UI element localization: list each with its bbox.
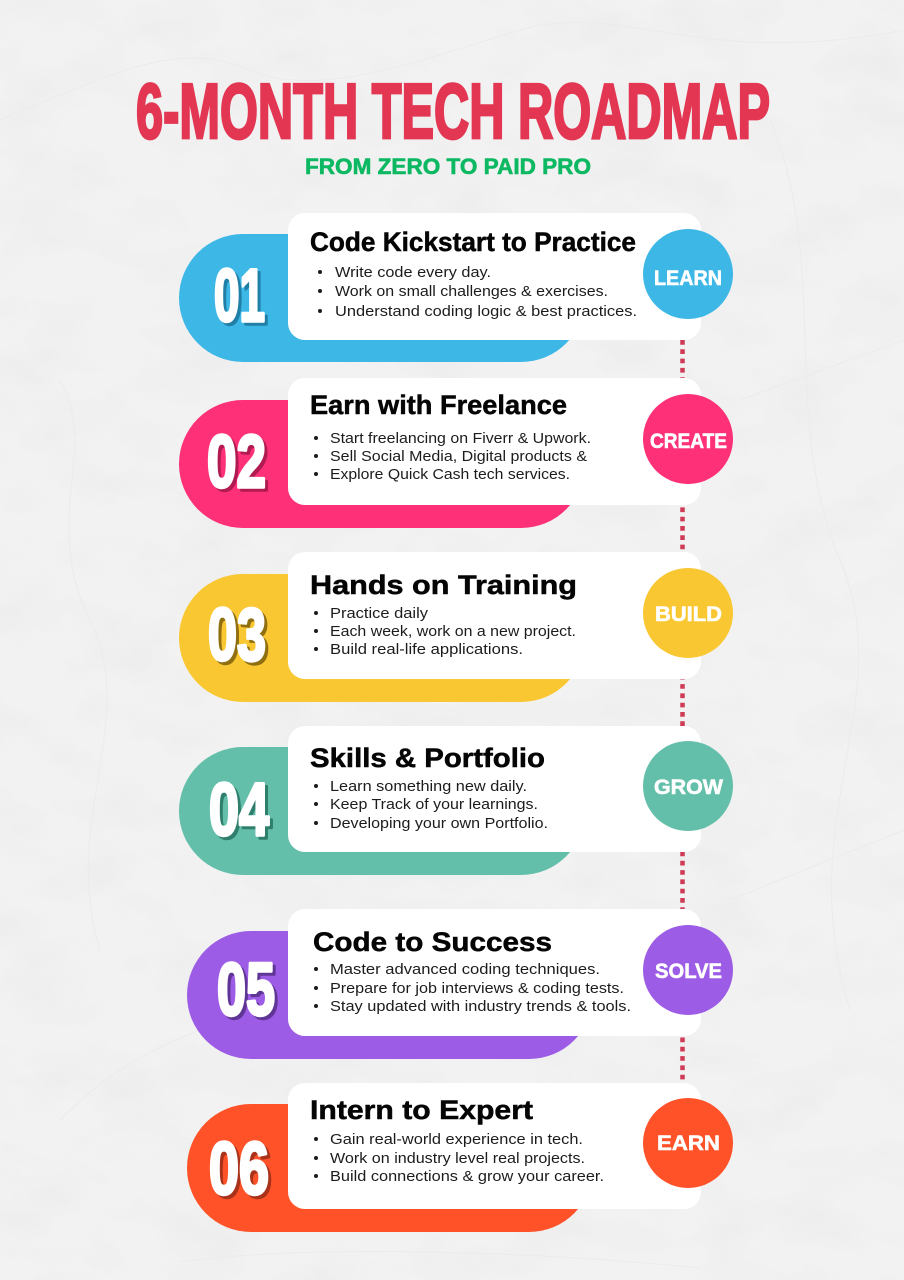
dotted connector line — [680, 340, 685, 1083]
step 01 badge: LEARN — [643, 229, 733, 319]
step 04 heading: Skills & Portfolio — [310, 743, 545, 773]
step 03 badge: BUILD — [643, 568, 733, 658]
step 03 badge: BUILD: BUILD — [655, 603, 722, 626]
step 01 white card — [288, 213, 701, 340]
step 01 badge: LEARN: LEARN — [654, 267, 722, 290]
step 04 white card — [288, 726, 701, 852]
step 03 bullet list: Each week, work on a new project. — [330, 623, 576, 640]
step 02 bullet list: Sell Social Media, Digital products & — [330, 448, 587, 465]
step 01 bullet list — [318, 264, 637, 320]
step 05 badge: SOLVE: SOLVE — [655, 960, 722, 983]
step 06 bullet list — [314, 1131, 604, 1185]
step 02 bullet list: Explore Quick Cash tech services. — [330, 466, 570, 483]
step 04 coloured pill — [179, 747, 585, 875]
step 01 bullet list: Work on small challenges & exercises. — [335, 283, 608, 300]
subtitle: FROM ZERO TO PAID PRO — [305, 154, 591, 179]
step 03 number: 03 — [211, 596, 269, 679]
step 05 badge: SOLVE — [643, 925, 733, 1015]
step 05 number: 05 — [217, 948, 275, 1031]
step 06 number: 06 — [209, 1127, 269, 1210]
step 03 coloured pill — [179, 574, 585, 702]
step 05 bullet list: Prepare for job interviews & coding tests. — [330, 980, 624, 997]
step 05 heading: Code to Success — [313, 927, 552, 957]
step 03 number: 03 — [208, 593, 266, 676]
step 04 bullet list: Keep Track of your learnings. — [330, 796, 538, 813]
step 06 badge: EARN: EARN — [657, 1132, 720, 1155]
step 01 bullet list: Write code every day. — [335, 264, 491, 281]
step 06 heading: Intern to Expert — [310, 1095, 533, 1125]
step 06 badge: EARN — [643, 1098, 733, 1188]
step 04 number: 04 — [212, 771, 272, 854]
step 01 number — [214, 254, 268, 340]
step 05 number: 05 — [220, 951, 278, 1034]
step 02 badge: CREATE — [643, 394, 733, 484]
step 05 white card — [288, 909, 701, 1036]
panel: step 01 — [179, 213, 733, 362]
step 05 bullet list: Stay updated with industry trends & tools. — [330, 998, 631, 1015]
step 02 bullet list: Start freelancing on Fiverr & Upwork. — [330, 430, 591, 447]
step 03 bullet list — [314, 605, 576, 658]
step 02 coloured pill — [179, 400, 585, 528]
step 03 heading: Hands on Training — [310, 570, 577, 600]
step 05 coloured pill — [187, 931, 593, 1059]
step 04 bullet list: Developing your own Portfolio. — [330, 815, 548, 832]
step 03 white card — [288, 552, 701, 679]
step 03 bullet list: Practice daily — [330, 605, 429, 622]
panel: step 03 — [179, 552, 733, 702]
panel: step 05 — [187, 909, 733, 1059]
step 06 bullet list: Build connections & grow your career. — [330, 1168, 604, 1185]
step 06 number: 06 — [212, 1130, 272, 1213]
step 01 heading: Code Kickstart to Practice — [310, 227, 636, 257]
step 06 coloured pill — [187, 1104, 593, 1232]
step 06 bullet list: Work on industry level real projects. — [330, 1150, 585, 1167]
step 06 white card — [288, 1083, 701, 1209]
step 01 bullet list: Understand coding logic & best practices. — [335, 303, 637, 320]
step 02 number: 02 — [210, 423, 269, 506]
step 03 bullet list: Build real-life applications. — [330, 641, 523, 658]
step 02 heading: Earn with Freelance — [310, 390, 567, 420]
step 04 bullet list: Learn something new daily. — [330, 778, 527, 795]
step 02 number: 02 — [207, 420, 266, 503]
step 02 bullet list — [314, 430, 591, 483]
step 04 number: 04 — [209, 768, 269, 851]
step 01 number: 01 — [217, 257, 268, 340]
panel: step 06 — [187, 1083, 733, 1232]
step 02 white card — [288, 378, 701, 505]
step 04 badge: GROW — [643, 741, 733, 831]
step 04 bullet list — [314, 778, 548, 832]
step 02 badge: CREATE: CREATE — [650, 430, 727, 453]
step 06 bullet list: Gain real-world experience in tech. — [330, 1131, 583, 1148]
step 01 coloured pill — [179, 234, 585, 362]
step 05 bullet list: Master advanced coding techniques. — [330, 961, 600, 978]
step 05 bullet list — [314, 961, 631, 1015]
step 04 badge: GROW: GROW — [654, 776, 723, 799]
panel: step 02 — [179, 378, 733, 528]
panel: step 04 — [179, 726, 733, 875]
step 01 number: 01 — [214, 254, 265, 337]
